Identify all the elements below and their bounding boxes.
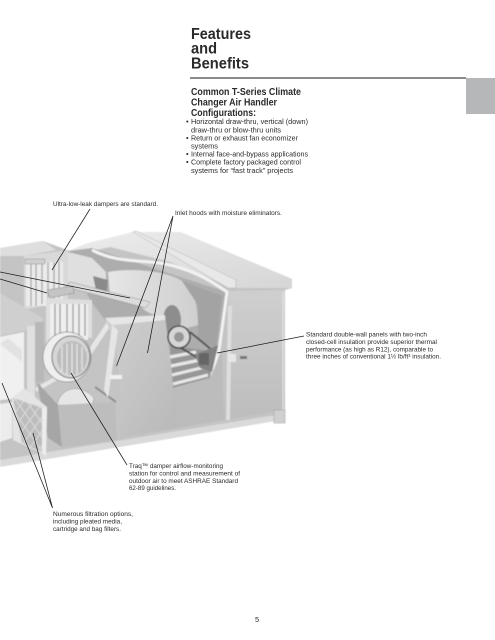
subheading: Changer Air Handler [191, 98, 277, 109]
bullet list: • [186, 117, 189, 126]
filter door [12, 388, 47, 456]
fan section interior [68, 248, 227, 388]
fan scroll [108, 270, 198, 330]
leader: upper left lines [0, 272, 130, 298]
title: Benefits [191, 55, 249, 72]
leader: dampers [52, 209, 90, 270]
bullet list: Internal face-and-bypass applications [191, 150, 308, 159]
leader: filtration [2, 383, 52, 508]
caption: double-wall panels: three inches of conventional 1½ lb/ft³ insulation. [306, 353, 441, 361]
inlet hood panel [104, 315, 178, 438]
leader: inlet hoods [116, 216, 173, 366]
front frame left [0, 322, 44, 442]
title: Features [191, 26, 251, 43]
upper damper housing [24, 250, 68, 310]
roof edge band [133, 231, 236, 288]
bullet list: systems [191, 142, 218, 151]
lower damper box [37, 382, 117, 448]
caption: filtration: Numerous filtration options, [53, 511, 133, 518]
lower damper louvers [46, 286, 92, 345]
intake mesh [163, 305, 181, 335]
caption: double-wall panels: Standard double-wall panels with two-inch [306, 332, 427, 339]
bullet list: • [186, 133, 189, 142]
title [191, 26, 251, 72]
caption: double-wall panels: closed-cell insulation provide superior thermal [306, 339, 438, 346]
illustration: cutaway air handler unit [0, 231, 292, 467]
unit body silhouette [0, 232, 292, 465]
fan pulley and belts [168, 326, 218, 372]
bullet list: draw-thru or blow-thru units [191, 125, 281, 134]
left roof section [0, 241, 56, 256]
bullet list: Horizontal draw-thru, vertical (down) [191, 117, 308, 126]
discharge duct block [93, 272, 165, 302]
leader: Traq damper [71, 373, 127, 465]
cross beam [66, 282, 150, 308]
caption: double-wall panels [306, 332, 441, 361]
airflow-monitoring damper ring [36, 322, 110, 390]
bullet list [186, 117, 308, 175]
corner foot [274, 410, 285, 423]
bullet list: • [186, 150, 189, 159]
title: and [191, 41, 217, 58]
left roof lower module [0, 293, 43, 336]
lower body panel [173, 350, 224, 428]
bullet list: • [186, 158, 189, 167]
caption: filtration [53, 511, 133, 533]
caption: filtration: cartridge and bag filters. [53, 526, 121, 533]
subheading: Configurations: [191, 108, 256, 119]
coil steps [170, 345, 215, 388]
side tab [466, 78, 495, 114]
subheading [191, 87, 301, 119]
bullet list: Return or exhaust fan economizer [191, 133, 298, 142]
page number: 5 [255, 615, 259, 624]
caption: double-wall panels: performance (as high as R12), comparable to [306, 346, 433, 354]
base rail [0, 414, 282, 467]
interior upper frame [92, 250, 227, 388]
caption: Traq damper: station for control and measurement of [129, 471, 240, 478]
caption: Traq damper: 62-89 guidelines. [129, 485, 176, 492]
bullet list: Complete factory packaged control [191, 158, 301, 167]
header rule [190, 77, 466, 79]
right access door panel [224, 290, 285, 420]
fan shadow interior [182, 281, 222, 348]
caption: filtration: including pleated media, [53, 519, 122, 526]
caption: Traq damper: Traq™ damper airflow-monitoring [129, 463, 223, 470]
upper duct wall [68, 252, 106, 292]
caption: Traq damper [129, 463, 240, 492]
leader lines [0, 209, 304, 508]
bullet list: systems for “fast track” projects [191, 166, 293, 175]
caption: inlet hoods: Inlet hoods with moisture eliminators. [175, 210, 282, 217]
caption: dampers: Ultra-low-leak dampers are standard. [53, 201, 158, 208]
leader: double-wall panels [217, 336, 304, 353]
subheading: Common T-Series Climate [191, 87, 301, 98]
main roof [68, 232, 292, 288]
caption: Traq damper: outdoor air to meet ASHRAE Standard [129, 478, 238, 485]
